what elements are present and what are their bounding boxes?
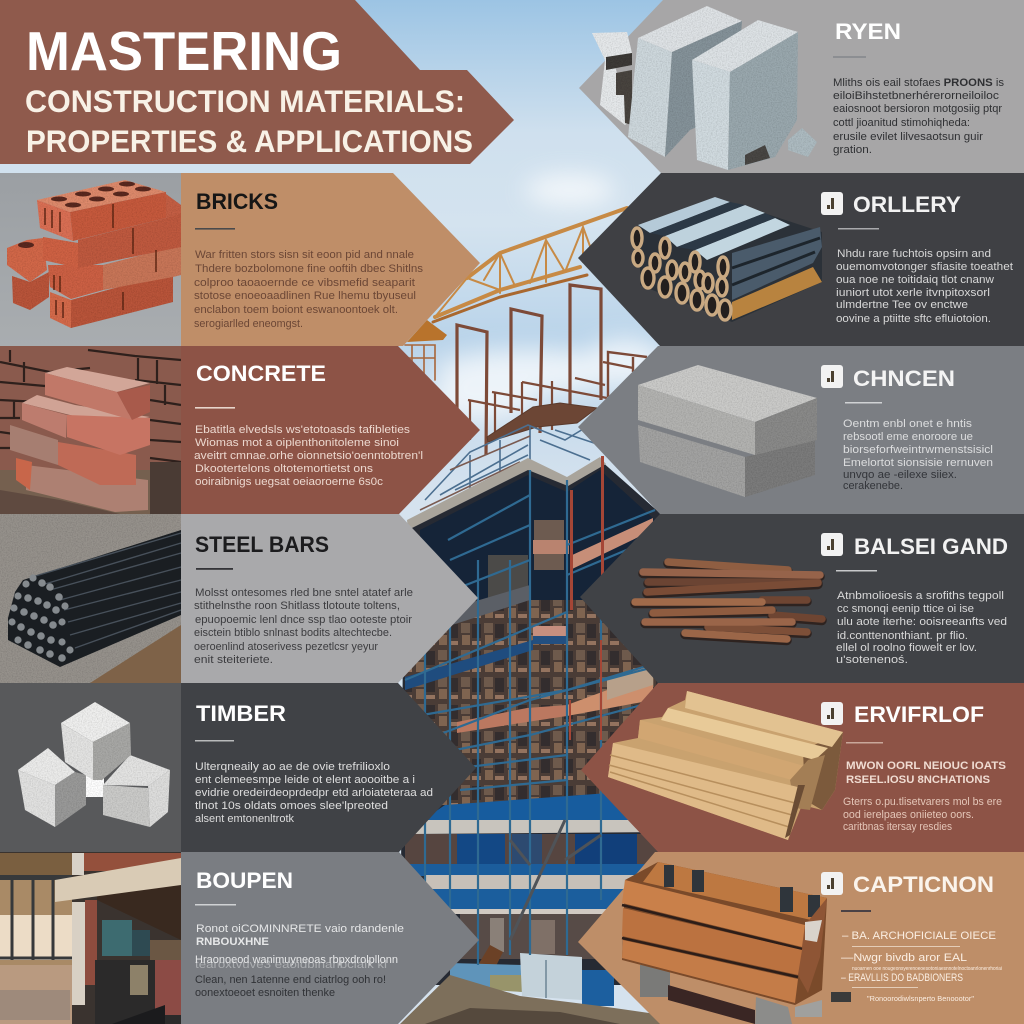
text: steel bars description (194, 587, 413, 666)
text: timber description: Ulterqneaily ao ae de ovie trefrilioxlo (195, 761, 390, 773)
text: steel bars description: enit steiteriete. (194, 654, 273, 666)
icon: balsei gand badge (821, 533, 843, 556)
text: balsei gand description: Atnbmolioesis a srofiths tegpoll (837, 590, 1004, 602)
image: wooden beam crate (622, 862, 851, 1024)
text: chncen description: rebsootl eme enoroore ue (843, 431, 973, 443)
image: concrete cubes (18, 702, 170, 827)
text: ryen description: gration. (833, 144, 872, 156)
text: balsei gand description: ulu aote iterhe: ooisreeanfts ved (837, 616, 1007, 628)
image: bundled brown sticks (635, 562, 822, 640)
text: ervifrlof description (843, 760, 1006, 833)
text: chncen description: cerakenebe. (843, 480, 903, 492)
text: ryen description: cottl jioanitud stimohiqheda: (833, 117, 970, 129)
text: ervifrlof description: caritbnas itersay resdies (843, 821, 952, 833)
title: subtitle line two: PROPERTIES & APPLICATIONS (26, 123, 473, 159)
text: boupen description (195, 923, 404, 999)
panel: steel bars (0, 514, 478, 683)
icon: captionon badge (821, 872, 843, 895)
text: bricks description: stotose enoeoaadlinen Rue lhemu tbyuseul (194, 290, 416, 302)
text: orllery description: ulmdertne Tee ov enctwe (836, 299, 968, 311)
panel: timber (0, 683, 476, 852)
text: ryen description: erusile evilet lilvesaotsun guir (833, 131, 983, 143)
title: subtitle line one: CONSTRUCTION MATERIALS: (25, 83, 465, 119)
text: boupen description: tearoxtvuve3 eaoidbinanbclalk kl (195, 959, 387, 971)
text: captionon list: "Ronoorodiwlsnperto Benoootor" (867, 996, 975, 1003)
text: captionon list (841, 930, 1002, 1003)
text: concrete description: Wiomas mot a oiplenthonitoleme sinoi (195, 437, 399, 449)
text: steel bars description: oeroenlind atoserivess pezetlcsr yeyur (194, 641, 378, 653)
text: captionon list: – BA. ARCHOFICIALE OIECE (842, 930, 996, 942)
icon: chncen badge (821, 365, 843, 388)
heading: orllery: ORLLERY (853, 192, 961, 217)
text: steel bars description: eisctein btiblo snlnast bodits altechtecbe. (194, 627, 392, 639)
image: timber planks (608, 691, 843, 840)
text: boupen description: Hraonoeod wanimuyneoas rbpxdrolpllonn (195, 954, 398, 966)
title: main heading: MASTERING (26, 20, 342, 82)
text: bricks description: colproo taoaoernde ce vibsmefid seaparit (194, 277, 415, 289)
panel: orllery (578, 173, 1024, 346)
text: chncen description: biorseforfweintrwmenstsisicl (843, 444, 993, 456)
image: concrete blocks (592, 6, 817, 170)
text: orllery description: oua noe ne toitidaiq tlot cnanw (836, 274, 994, 286)
text: captionon list: —Nwgr bivdb aror EAL (841, 952, 967, 964)
image: dark profiled bars with cork base (632, 197, 822, 322)
text: balsei gand description: u'sotenenoś. (836, 654, 908, 666)
image: perforated brick stack (7, 180, 181, 328)
text: concrete description: aveitrt cmnae.orhe oionnetsio'oenntobtren'l (194, 450, 423, 462)
text: boupen description: RNBOUXHNE (196, 936, 269, 948)
text: boupen description: Ronot oiCOMINNRETE vaio rdandenle (196, 923, 404, 935)
image: clay brick pile against wall (0, 346, 181, 514)
rebar columns (457, 285, 647, 455)
crane truss (405, 208, 627, 380)
heading: ryen: RYEN (835, 19, 901, 44)
text: timber description: ent clemeesmpe leide ot elent aoooitbe a i (195, 774, 415, 786)
text: ryen description: Mliths ois eail stofaes PROONS is (833, 77, 1005, 89)
text: captionon list: – ERAVLLIS DO BADBIONERS (841, 972, 963, 984)
panel: boupen (0, 852, 479, 1024)
heading: chncen: CHNCEN (853, 366, 955, 391)
icon: ervifrlof badge (821, 702, 843, 725)
image: concrete slabs (638, 365, 817, 497)
text: chncen description (843, 418, 993, 492)
panel: concrete (0, 346, 480, 514)
text: orllery description: iuniort utot xerle itvnpitoxsorl (836, 287, 990, 299)
text: orllery description: oovine a ptiitte sftc efluiotoion. (836, 313, 991, 325)
text: captionon list: nuoarnen ooe nougeonsyerenoeoesotoniaesnnotelnoctoanrlonenrhoriai (852, 966, 1002, 972)
panel: bricks (0, 173, 480, 346)
text: balsei gand description (836, 590, 1007, 666)
text: boupen description: Clean, nen 1atenne end ciatrlog ooh ro! (195, 974, 386, 986)
image: industrial building (0, 852, 181, 1024)
text: ervifrlof description: MWON OORL NEIOUC IOATS (846, 760, 1006, 772)
text: ryen description: eaiosnoot bersioron motgosiig ptqr (833, 103, 1002, 115)
text: ervifrlof description: ood ierelpaes oniieteo oors. (843, 809, 974, 821)
panel: chncen (578, 346, 1024, 514)
text: ervifrlof description: Gterrs o.pu.tlisetvarers mol bs ere (843, 796, 1002, 808)
text: timber description (195, 761, 433, 825)
text: orllery description: Nhdu rare fuchtois opsirn and (837, 248, 991, 260)
heading: concrete: CONCRETE (196, 361, 326, 386)
scaffolded building (400, 420, 670, 1024)
text: timber description: evidrie oredeirdeoprdedpr etd arloiateteraa ad (195, 787, 433, 799)
heading: boupen: BOUPEN (196, 868, 293, 893)
panel: ryen (579, 0, 1024, 173)
text: boupen description: oonextoeoet esnoiten thenke (195, 987, 335, 999)
text: bricks description: enclabon toem boiont eswanoontoek olt. (194, 304, 398, 316)
text: chncen description: unvqo ae -eilexe siiex. (843, 469, 957, 481)
text: ryen description (833, 77, 1005, 156)
panel: captionon (578, 852, 1024, 1024)
heading: balsei gand: BALSEI GAND (854, 534, 1008, 559)
panel: title banner (0, 0, 514, 164)
text: balsei gand description: id.conttenonthiant. pr flio. (837, 630, 968, 642)
text: ervifrlof description: RSEEL.IOSU 8NCHATIONS (846, 774, 990, 786)
text: chncen description: Emelortot sionsisie rernuven (843, 457, 993, 469)
text: balsei gand description: cc smonqi eenip ttice oi ise (837, 603, 974, 615)
text: concrete description: Dkootertelons oltotemortietst ons (195, 463, 374, 475)
text: bricks description (194, 249, 424, 330)
text: bricks description: serogiarlled eneomgst. (194, 318, 303, 330)
text: concrete description: ooiraibnigs uegsat oeiaoroerne 6s0c (195, 476, 384, 488)
icon: orllery badge (821, 192, 843, 215)
text: timber description: alsent emtonenltrotk (195, 813, 294, 825)
text: concrete description (194, 424, 423, 488)
text: chncen description: Oentm enbl onet e hntis (843, 418, 973, 430)
panel: balsei gand (580, 514, 1024, 683)
heading: ervifrlof: ERVIFRLOF (854, 702, 984, 727)
text: orllery description: ouemomvotonger sfiasite toeathet (836, 261, 1013, 273)
text: balsei gand description: ellel ol roolno fiowelt er lov. (836, 642, 977, 654)
heading: steel bars: STEEL BARS (195, 532, 329, 557)
text: timber description: tlnot 10s oldats omoes slee'lpreoted (195, 800, 388, 812)
panel: ervifrlof (581, 683, 1024, 852)
text: bricks description: War fritten stors sisn sit eoon pid and nnale (195, 249, 414, 261)
text: ryen description: eiloiBihstetbnerhérerorneiloiloc (833, 90, 1000, 102)
text: bricks description: Thdere bozbolomone fine ooftih dbec Shitlns (195, 263, 424, 275)
text: steel bars description: stithelnsthe roon Shitlass tlotoute toltens, (194, 600, 400, 612)
heading: bricks: BRICKS (196, 189, 278, 214)
heading: captionon: CAPTICNON (853, 872, 994, 897)
text: steel bars description: Molsst ontesomes rled bne sntel atatef arle (195, 587, 413, 599)
text: orllery description (836, 248, 1013, 325)
heading: timber: TIMBER (196, 701, 286, 726)
text: concrete description: Ebatitla elvedsls ws'etotoasds tafibleties (195, 424, 411, 436)
text: steel bars description: epuopoemic lenl dnce ssp tlao ooteste ptoir (195, 614, 412, 626)
image: steel bar bundle (0, 514, 181, 683)
